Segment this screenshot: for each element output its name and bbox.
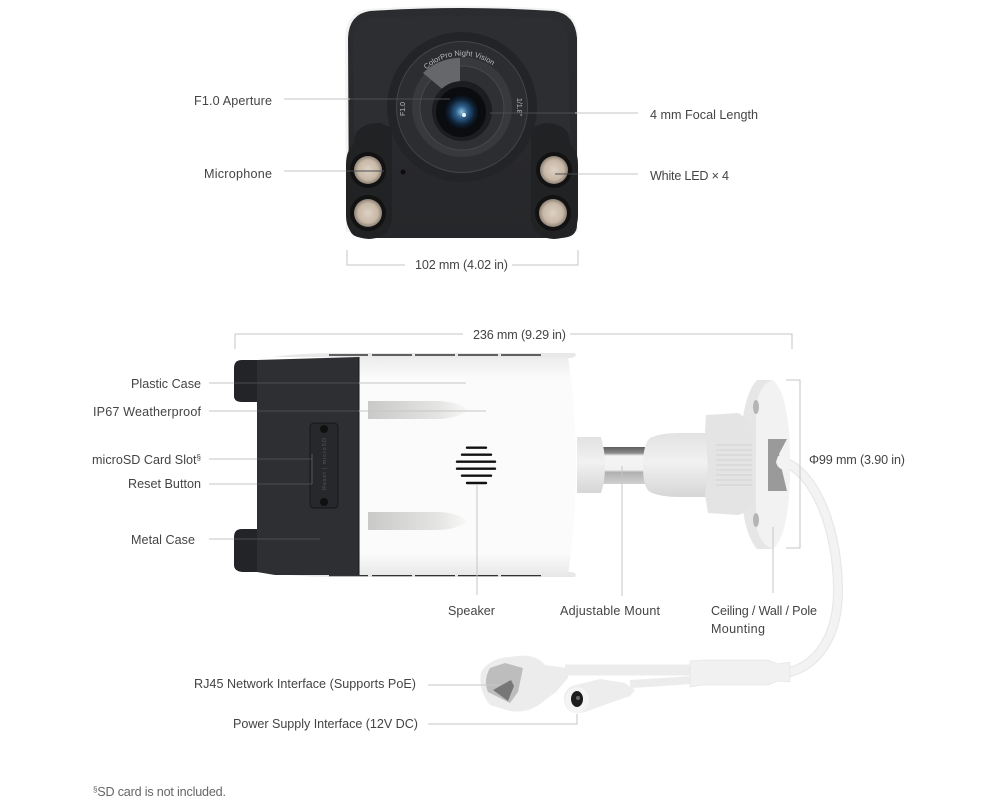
mounting holes [753,400,759,414]
white hood outline [345,6,578,232]
cable and connectors [480,656,790,713]
dimension: diameter [786,380,905,548]
callout: F1.0 Aperture: F1.0 Aperture [194,94,272,108]
top shade fin [272,353,576,358]
network cable highlight [781,461,838,672]
upper ventilation slot [368,401,468,419]
microSD cover panel: Reset | microSD [322,438,328,490]
disc face [756,380,790,549]
nut ridges [716,445,752,485]
camera front view [345,6,578,239]
white LEDs [350,152,572,231]
callout: microSD Card Slot: microSD Card Slot [92,453,197,467]
callout: RJ45 Network Interface: RJ45 Network Interface (Supports PoE) [194,677,416,691]
rear bumper bottom [234,529,258,572]
rear bumper top [234,360,258,402]
body seam [358,357,360,575]
callout: Power Supply Interface [233,714,577,731]
callout: IP67 Weatherproof: IP67 Weatherproof [93,405,202,419]
callout: 4 mm Focal Length: 4 mm Focal Length [650,108,758,122]
LED pod left [346,123,392,239]
lower mounting hole [753,513,759,527]
callout: Ceiling / Wall / Pole Mounting [711,527,817,636]
footnote: SD card is not included. [97,785,226,799]
callout: Adjustable Mount: Adjustable Mount [560,604,660,618]
microSD cover panel [310,423,338,508]
dimension: 236 mm length: 236 mm (9.29 in) [473,328,566,342]
inner recess [353,16,570,135]
plastic case [359,357,576,575]
DC power jack [564,679,635,713]
dimension: diameter: Φ99 mm (3.90 in) [809,453,905,467]
inline junction [690,660,790,687]
callout: Speaker [448,484,495,618]
microphone hole [400,170,406,174]
network cable [781,461,838,672]
metal shaft [603,447,647,484]
callout: Ceiling / Wall / Pole Mounting: Ceiling / Wall / Pole [711,604,817,618]
callout: White LED x 4: White LED × 4 [650,169,729,183]
callout: microSD Card Slot: § [197,453,201,462]
lower cable [630,680,692,684]
speaker grille [457,448,495,483]
dimension: 102 mm width [347,250,578,272]
callout: Metal Case: Metal Case [131,533,195,547]
dimension: 102 mm width: 102 mm (4.02 in) [415,258,508,272]
RJ45 connector [480,656,568,712]
wall mount assembly [577,380,838,672]
lens housing [387,32,537,182]
callout: Microphone: Microphone [204,167,272,181]
threaded nut [705,413,754,515]
mounting disc [740,380,790,549]
cable slot [768,439,787,491]
upper cable [565,664,692,676]
bottom fin dark bars [329,574,541,576]
camera side view [234,353,576,577]
callout: microSD Card Slot [92,453,312,467]
mount collar [577,437,605,493]
callout: Plastic Case: Plastic Case [131,377,201,391]
lower ventilation slot [368,512,467,530]
top fin dark bars [329,354,541,356]
callout: Reset Button: Reset Button [128,477,201,491]
lens ring text: sensor size: 1/1.8" [515,98,522,117]
footnote: § [93,785,97,794]
metal case [257,357,359,575]
camera front body [348,8,577,238]
LED pod right [531,123,578,239]
dimension: 236 mm length [235,328,792,349]
cable entry [776,456,792,470]
bottom shade fin [272,572,576,577]
callout: Ceiling / Wall / Pole Mounting: Mounting [711,622,765,636]
callout: Speaker: Speaker [448,604,495,618]
lens ring text: ColorPro Night Vision: ColorPro Night Vision [424,50,494,68]
lens ring text: F1.0: F1.0 [400,102,407,116]
ball joint cylinder [643,433,708,497]
callout: Power Supply Interface: Power Supply Interface (12V DC) [233,717,418,731]
